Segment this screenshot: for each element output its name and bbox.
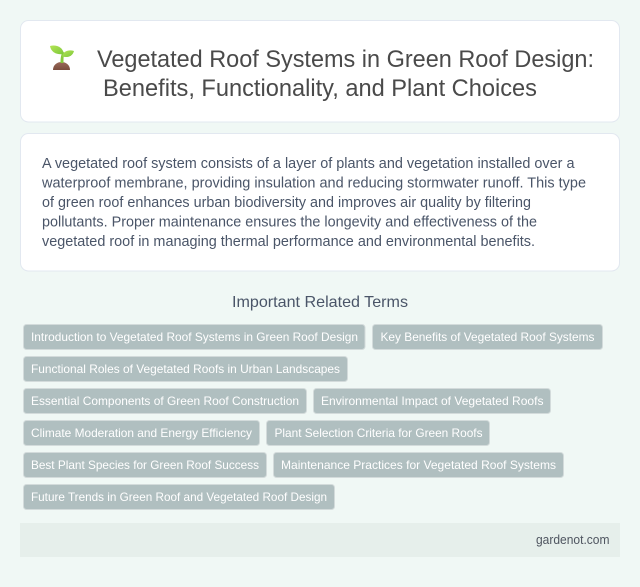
tag: introduction: Introduction to Vegetated Roof Systems in Green Roof Design xyxy=(31,330,358,344)
footer bar xyxy=(20,523,620,557)
tag: essential components: Essential Components of Green Roof Construction xyxy=(31,394,299,408)
tag: functional roles xyxy=(24,356,348,382)
tag: introduction xyxy=(24,324,365,350)
title: Vegetated Roof Systems in Green Roof Design: xyxy=(97,46,594,73)
tag: functional roles: Functional Roles of Vegetated Roofs in Urban Landscapes xyxy=(31,362,340,376)
tag: plant selection: Plant Selection Criteria for Green Roofs xyxy=(274,426,482,440)
tag: plant selection xyxy=(266,420,490,446)
icon: seedling xyxy=(50,46,74,70)
tag: maintenance practices xyxy=(274,452,564,478)
description text: of green roof enhances urban biodiversity and improves air quality by filtering xyxy=(42,195,531,211)
tag: future trends xyxy=(24,484,334,510)
tag: maintenance practices: Maintenance Practices for Vegetated Roof Systems xyxy=(281,458,556,472)
title xyxy=(97,46,594,102)
title: Benefits, Functionality, and Plant Choices xyxy=(103,75,537,102)
description text: waterproof membrane, providing insulation and reducing stormwater runoff. This type xyxy=(41,176,586,192)
tag: key benefits: Key Benefits of Vegetated Roof Systems xyxy=(380,330,594,344)
tag: environmental impact xyxy=(314,388,550,414)
description text: pollutants. Proper maintenance ensures the longevity and effectiveness of the xyxy=(42,214,537,230)
tag: best plant species xyxy=(24,452,266,478)
tag: key benefits xyxy=(372,324,602,350)
footer source text: gardenot.com xyxy=(536,533,610,547)
tag: future trends: Future Trends in Green Roof and Vegetated Roof Design xyxy=(31,490,327,504)
related terms tags xyxy=(24,324,602,510)
tag: best plant species: Best Plant Species for Green Roof Success xyxy=(31,458,259,472)
heading: important related terms: Important Related Terms xyxy=(232,294,408,311)
tag: environmental impact: Environmental Impact of Vegetated Roofs xyxy=(321,394,544,408)
panel: title card xyxy=(20,20,620,122)
description text: vegetated roof in managing thermal performance and environmental benefits. xyxy=(42,234,535,250)
panel: description card xyxy=(20,134,620,271)
tag: climate moderation: Climate Moderation and Energy Efficiency xyxy=(31,426,252,440)
description text: A vegetated roof system consists of a layer of plants and vegetation installed over a xyxy=(42,156,575,172)
description text xyxy=(41,156,586,250)
tag: climate moderation xyxy=(24,420,260,446)
tag: essential components xyxy=(24,388,306,414)
